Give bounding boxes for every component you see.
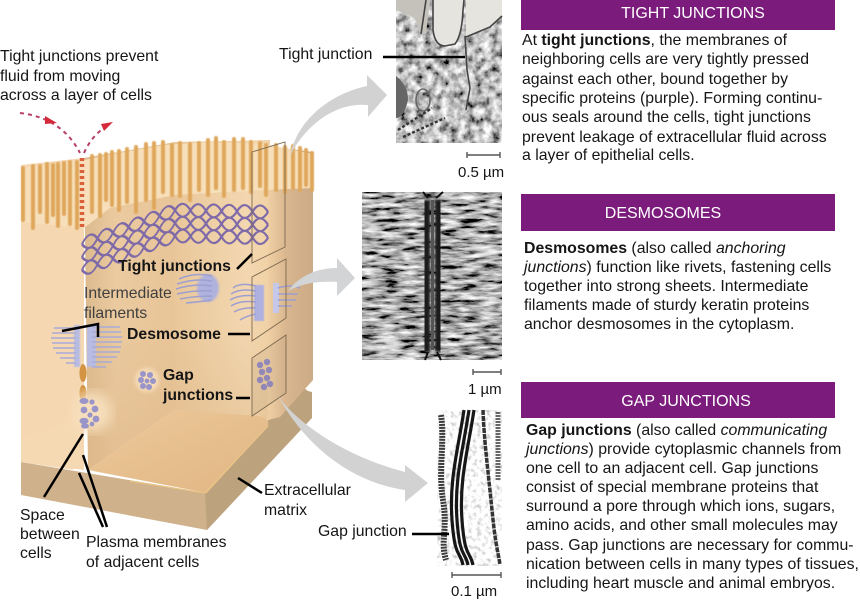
label: tight junction: Tight junction	[279, 46, 372, 63]
scale bar: 1 µm: 1 µm	[468, 381, 502, 398]
gap junction: right	[257, 359, 273, 390]
gap junction: back wall	[135, 368, 159, 392]
panel: desmosomes	[521, 194, 835, 333]
text: tight junctions description: prevent leakage of extracellular fluid across	[522, 129, 827, 146]
panel: tight junctions	[521, 0, 835, 164]
detail frames on the cell edge	[252, 142, 286, 416]
lower wall shading	[88, 320, 270, 470]
label: extracellular matrix: matrix	[264, 502, 307, 519]
scale bar: 0.5 µm	[458, 152, 504, 181]
panel: gap junctions	[521, 382, 859, 592]
label: tight junctions on diagram: Tight junctions	[118, 258, 231, 275]
heading: desmosomes: DESMOSOMES	[605, 205, 721, 222]
label: extracellular matrix	[264, 482, 351, 519]
text: tight junctions prevent fluid leakage: Tight junctions prevent	[0, 48, 159, 65]
text: desmosomes description: junctions) function like rivets, fastening cells	[522, 259, 831, 276]
heading: tight junctions	[521, 0, 835, 30]
heading: tight junctions: TIGHT JUNCTIONS	[621, 5, 765, 22]
text: desmosomes description: filaments made of sturdy keratin proteins	[524, 297, 809, 314]
text: gap junctions description: including heart muscle and animal embryos.	[526, 575, 835, 592]
text: gap junctions description: amino acids, and other small molecules may	[526, 517, 838, 534]
scale bar: 0.1 µm	[451, 572, 501, 600]
desmosome: right side	[230, 283, 300, 321]
label: gap junctions on diagram	[162, 367, 233, 404]
text: desmosomes description: anchor desmosomes in the cytoplasm.	[524, 316, 794, 333]
leader lines	[44, 57, 465, 534]
text: desmosomes description: together into strong sheets. Intermediate	[524, 278, 809, 295]
text: tight junctions prevent fluid leakage	[0, 48, 159, 104]
grey arrow to desmosome micrograph	[288, 258, 355, 296]
extracellular matrix slab	[21, 388, 312, 530]
scale bar: 1 µm	[468, 369, 502, 398]
text: tight junctions prevent fluid leakage: across a layer of cells	[0, 87, 152, 104]
micrograph: tight junction	[396, 0, 502, 143]
tight junction protein strands	[82, 204, 268, 276]
label: plasma membranes	[86, 534, 227, 571]
heading: gap junctions: GAP JUNCTIONS	[621, 393, 751, 410]
floor edge highlight	[130, 426, 268, 493]
desmosomes	[51, 274, 300, 367]
text: desmosomes description	[522, 240, 831, 333]
text: tight junctions description: against each other, bound together by	[522, 71, 788, 88]
grey arrow to gap junction micrograph	[278, 396, 428, 502]
grey arrow to tight junction micrograph	[290, 75, 387, 157]
back wall, left section	[84, 142, 175, 470]
text: tight junctions description: At tight junctions, the membranes of	[522, 32, 788, 49]
label: intermediate filaments: Intermediate	[84, 285, 172, 302]
text: gap junctions description	[524, 422, 859, 592]
text: gap junctions description: surround a pore through which ions, sugars,	[526, 498, 835, 515]
illustration: epithelial cell layer on extracellular matrix	[20, 113, 313, 530]
text: gap junctions description: Gap junctions (also called communicating	[526, 422, 827, 439]
text: gap junctions description: one cell to an adjacent cell. Gap junctions	[526, 460, 818, 477]
label: space between cells: between	[20, 526, 80, 543]
scale bar: 0.5 µm: 0.5 µm	[458, 164, 504, 181]
junction between adjacent cells	[79, 140, 269, 470]
label: gap junctions on diagram: Gap	[163, 367, 194, 384]
label: desmosome: Desmosome	[127, 326, 221, 343]
text: desmosomes description: Desmosomes (also called anchoring	[524, 240, 786, 257]
heading: desmosomes	[521, 194, 835, 231]
micrograph: gap junction	[437, 410, 502, 566]
heading: gap junctions	[521, 382, 835, 418]
text: tight junctions description: ous seals around the cells, tight junctions	[522, 109, 811, 126]
label: intermediate filaments: filaments	[84, 305, 147, 322]
label: extracellular matrix: Extracellular	[264, 482, 351, 499]
label: space between cells: cells	[20, 545, 52, 562]
back wall, right section	[175, 140, 270, 420]
text: tight junctions prevent fluid leakage: fluid from moving	[0, 68, 120, 85]
desmosome: back wall	[176, 274, 219, 303]
label: intermediate filaments	[84, 285, 172, 322]
label: space between cells: Space	[20, 507, 65, 524]
text: tight junctions description: neighboring cells are very tightly pressed	[522, 51, 809, 68]
text: gap junctions description: junctions) provide cytoplasmic channels from	[524, 441, 841, 458]
text: gap junctions description: consist of special membrane proteins that	[526, 479, 819, 496]
label: plasma membranes: Plasma membranes	[86, 534, 227, 551]
text: tight junctions description: specific proteins (purple). Forming continu-	[522, 90, 822, 107]
text: tight junctions description: a layer of epithelial cells.	[522, 147, 695, 164]
text: gap junctions description: pass. Gap junctions are necessary for commu-	[526, 537, 854, 554]
desmosome: front left	[51, 325, 122, 367]
right cell	[268, 146, 313, 420]
left cell floor	[21, 414, 81, 469]
red dashed arrows: fluid blocked by tight junction	[20, 113, 113, 153]
left cell face	[21, 158, 84, 470]
cell floor	[88, 410, 268, 493]
scale bar: 0.1 µm: 0.1 µm	[451, 583, 497, 600]
microvilli	[21, 138, 313, 228]
micrograph: desmosome	[362, 192, 502, 360]
gap junction: front	[72, 392, 112, 432]
label: gap junctions on diagram: junctions	[162, 387, 233, 404]
label: space between cells	[20, 507, 80, 562]
text: tight junctions description	[522, 32, 827, 164]
gap junction clusters	[72, 359, 273, 432]
label: plasma membranes: of adjacent cells	[86, 554, 199, 571]
text: gap junctions description: nication between cells in many types of tissues,	[526, 556, 859, 573]
label: gap junction micrograph: Gap junction	[318, 523, 407, 540]
